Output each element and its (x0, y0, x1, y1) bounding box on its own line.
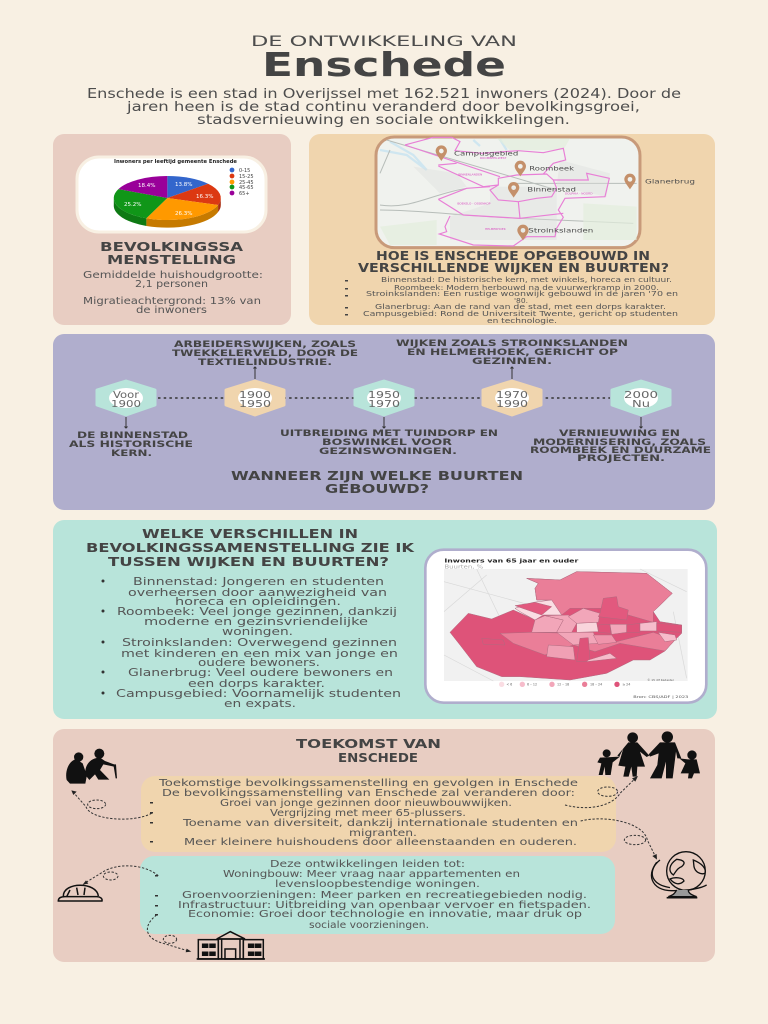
box: bevolkingssamenstelling toekomst: De bevolkingssamenstelling van Enschede zal veranderen door: (162, 788, 575, 799)
arrow: gebouw (147, 915, 191, 952)
node: 1950-1970 (355, 381, 413, 415)
panel: toekomst (53, 729, 715, 962)
list: wijken: Binnenstad: De historische kern, met winkels, horeca en cultuur. (381, 275, 672, 284)
list: verschillen: moderne en gezinsvriendelijke (144, 616, 368, 628)
heading: tijdlijn (231, 469, 523, 496)
label: vernieuwing: VERNIEUWING EN (559, 429, 680, 439)
label: binnenstad: KERN. (111, 449, 152, 459)
label: binnenstad: ALS HISTORISCHE (69, 440, 193, 450)
arrow: gezin (565, 776, 638, 808)
label: vernieuwing: MODERNISERING, ZOALS (533, 438, 706, 448)
map: inwoners 65+: Bron: CBS/ADF | 2023 (633, 695, 688, 699)
wijkenkaart: ROOMBEEK-WEST (480, 156, 506, 160)
box: gevolgen: Groenvoorzieningen: Meer parken en recreatiegebieden nodig. (182, 890, 587, 901)
node: 2000-nu (612, 381, 670, 415)
node: 1950-1970: 1970 (368, 399, 400, 410)
list: wijken: Glanerbrug: Aan de rand van de stad, met een dorps karakter. (375, 302, 666, 311)
timeline line (158, 397, 610, 399)
text: kerncijfers (83, 270, 263, 316)
node: 2000-nu: 2000 (624, 390, 658, 401)
label: vernieuwing: ROOMBEEK EN DUURZAME (530, 446, 711, 456)
node: 1900-1950: 1950 (239, 399, 271, 410)
list: wijken: '80. (514, 296, 528, 305)
icon: wereldbol (651, 852, 707, 898)
list: verschillen: met kinderen en een mix van jonge en (121, 648, 398, 660)
pie chart card: 25-45 (239, 180, 254, 186)
intro text: Enschede is een stad in Overijssel met 162.521 inwoners (2024). Door de (87, 87, 681, 102)
map legend: ≥ 24 (622, 683, 630, 687)
map labels: Roombeek (529, 166, 574, 173)
map labels (454, 150, 695, 234)
node: 1970-1990: 1990 (496, 399, 528, 410)
box: bevolkingssamenstelling toekomst: Meer kleinere huishoudens door alleenstaanden en ouderen. (184, 837, 577, 848)
heading: bevolkingssamenstelling (100, 240, 244, 267)
panel: tijdlijn (53, 334, 715, 510)
text: kerncijfers: 2,1 personen (135, 279, 208, 290)
heading: tijdlijn: WANNEER ZIJN WELKE BUURTEN (231, 469, 523, 483)
wijkenkaart: BINNENLANDEN (458, 173, 482, 177)
map legend: 6 – 12 (527, 683, 537, 687)
label: uitbreiding: UITBREIDING MET TUINDORP EN (280, 429, 498, 439)
node: voor 1900 (97, 381, 155, 415)
heading: wijken (358, 249, 669, 275)
pie chart card: 16.3% (196, 194, 213, 200)
label: binnenstad: DE BINNENSTAD (77, 431, 188, 441)
map labels: Campusgebied (454, 150, 518, 157)
box: gevolgen: Woningbouw: Meer vraag naar appartementen en (223, 869, 520, 880)
map: inwoners 65+: © 15 dlf Kadaster (647, 678, 675, 682)
label: vernieuwing (530, 429, 711, 464)
intro text (87, 87, 681, 128)
heading: bevolkingssamenstelling: BEVOLKINGSSA (100, 240, 244, 254)
label: binnenstad (69, 431, 193, 459)
intro text: jaren heen is de stad continu veranderd door bevolkingsgroei, (126, 100, 640, 115)
list: wijken: en technologie. (487, 316, 557, 325)
pie chart card: 45-65 (239, 185, 254, 191)
panel: wijken en buurten (309, 134, 715, 325)
box: gevolgen: Infrastructuur: Uitbreiding van openbaar vervoer en fietspaden. (178, 900, 591, 911)
pie chart card: 26.3% (175, 211, 192, 217)
pie chart card (77, 157, 266, 232)
map: inwoners 65+ (425, 550, 706, 703)
title: Enschede (262, 45, 506, 84)
map title: Inwoners van 65 jaar en ouder (444, 558, 579, 564)
list: wijken (345, 275, 678, 325)
box: bevolkingssamenstelling toekomst: Toename van diversiteit, dankzij internationale studenten en (182, 818, 578, 829)
pie chart card: 15-25 (239, 174, 254, 180)
box: bevolkingssamenstelling toekomst: Groei van jonge gezinnen door nieuwbouwwijken. (220, 798, 512, 809)
map pins (436, 145, 636, 240)
map title (444, 558, 579, 570)
list: wijken: Stroinkslanden: Een rustige woonwijk gebouwd in de jaren '70 en (366, 289, 678, 298)
label: uitbreiding: GEZINSWONINGEN. (319, 447, 457, 457)
node: 1900-1950: 1900 (239, 390, 271, 401)
title (251, 34, 517, 84)
list: verschillen: Glanerbrug: Veel oudere bewoners en (128, 667, 393, 679)
list: wijken: Campusgebied: Rond de Universiteit Twente, gericht op studenten (363, 309, 678, 318)
heading: bevolkingssamenstelling: MENSTELLING (107, 253, 236, 267)
icon: helm (58, 885, 102, 901)
panel: bevolkingssamenstelling (53, 134, 291, 325)
pie chart card: 25.2% (124, 202, 141, 208)
list: verschillen: woningen. (222, 626, 293, 638)
heading: toekomst: ENSCHEDE (338, 751, 418, 765)
list: verschillen: Roombeek: Veel jonge gezinnen, dankzij (117, 606, 397, 618)
label: vernieuwing: PROJECTEN. (577, 454, 665, 464)
node: voor 1900: Voor (113, 390, 140, 401)
list: verschillen: Campusgebied: Voornamelijk studenten (116, 688, 401, 700)
map title: Buurten, % (444, 564, 484, 570)
label: arbeiderswijken: ARBEIDERSWIJKEN, ZOALS (174, 340, 356, 350)
timeline connectors (124, 367, 642, 428)
node: voor 1900: 1900 (111, 399, 141, 410)
map legend (499, 682, 630, 687)
node: 1970-1990 (483, 381, 541, 415)
arrow: helm (83, 866, 158, 885)
pie chart card: 65+ (239, 191, 250, 197)
list: verschillen: Binnenstad: Jongeren en studenten (133, 576, 384, 588)
node: 1950-1970: 1950 (368, 390, 400, 401)
box: bevolkingssamenstelling toekomst: Toekomstige bevolkingssamenstelling en gevolgen in Enschede (158, 778, 578, 789)
wijkenkaart: HELMERHOEK (485, 227, 507, 231)
map labels: Binnenstad (527, 187, 576, 194)
label: arbeiderswijken: TEXTIELINDUSTRIE. (198, 358, 332, 368)
list: verschillen: Stroinkslanden: Overwegend gezinnen (122, 637, 397, 649)
label: stroinkslanden: EN HELMERHOEK, GERICHT OP (407, 348, 619, 358)
heading: verschillen (86, 527, 415, 569)
arrow: ouderen (71, 790, 152, 819)
list: verschillen: overheersen door aanwezigheid van (128, 587, 387, 599)
pie chart card: 13.8% (175, 182, 192, 188)
label: arbeiderswijken (172, 340, 358, 368)
wijkenkaart: BOEKELO - OSSENKOP (457, 202, 491, 206)
heading: verschillen: BEVOLKINGSSAMENSTELLING ZIE IK (86, 541, 415, 555)
heading: verschillen: WELKE VERSCHILLEN IN (142, 527, 358, 541)
arrow: wereldbol (581, 819, 657, 860)
box: bevolkingssamenstelling toekomst: migranten. (349, 828, 417, 839)
list: wijken: Roombeek: Modern herbouwd na de vuurwerkramp in 2000. (394, 283, 659, 292)
list: verschillen: oudere bewoners. (198, 657, 320, 669)
node: 2000-nu: Nu (632, 399, 650, 410)
pie chart card: Inwoners per leeftijd gemeente Enschede (114, 159, 237, 165)
label: uitbreiding (280, 429, 498, 457)
box: gevolgen: sociale voorzieningen. (309, 920, 429, 931)
box: bevolkingssamenstelling toekomst: Vergrijzing met meer 65-plussers. (270, 808, 466, 819)
list: verschillen: een dorps karakter. (188, 678, 325, 690)
heading: verschillen: TUSSEN WIJKEN EN BUURTEN? (108, 555, 389, 569)
node: 1970-1990: 1970 (496, 390, 528, 401)
list: verschillen: en expats. (224, 698, 296, 710)
icon: gebouw (197, 932, 265, 959)
heading: wijken: HOE IS ENSCHEDE OPGEBOUWD IN (376, 249, 650, 263)
heading: tijdlijn: GEBOUWD? (325, 482, 429, 496)
map legend: < 6 (506, 683, 512, 687)
map legend: 18 – 24 (590, 683, 602, 687)
map labels: Stroinkslanden (528, 227, 593, 234)
text: kerncijfers: de inwoners (136, 305, 207, 316)
wijkenkaart (376, 137, 695, 248)
box: gevolgen: Economie: Groei door technologie en innovatie, maar druk op (188, 909, 582, 920)
label: stroinkslanden: GEZINNEN. (472, 357, 552, 367)
panel: verschillen (53, 520, 717, 719)
icon: gezin (597, 731, 700, 778)
pie chart card: 18.4% (138, 183, 155, 189)
pie chart card: 0-15 (239, 168, 250, 174)
title: DE ONTWIKKELING VAN (251, 34, 517, 50)
map labels: Glanerbrug (645, 178, 695, 185)
label: stroinkslanden (396, 339, 628, 367)
node: 1900-1950 (226, 381, 284, 415)
label: stroinkslanden: WIJKEN ZOALS STROINKSLANDEN (396, 339, 628, 349)
box: bevolkingssamenstelling toekomst (141, 776, 616, 852)
list: verschillen (102, 576, 401, 710)
intro text: stadsvernieuwing en sociale ontwikkelingen. (197, 113, 570, 128)
icon: ouderen (66, 749, 117, 784)
heading: toekomst: TOEKOMST VAN (296, 737, 441, 751)
wijkenkaart: DOLPHIA - NOORD (565, 191, 593, 195)
text: kerncijfers: Migratieachtergrond: 13% van (83, 296, 261, 307)
box: gevolgen: Deze ontwikkelingen leiden tot: (270, 859, 465, 870)
list: verschillen: horeca en opleidingen. (175, 596, 341, 608)
box: gevolgen: levensloopbestendige woningen. (275, 879, 480, 890)
label: uitbreiding: BOSWINKEL VOOR (322, 438, 452, 448)
heading: toekomst (296, 737, 441, 765)
label: arbeiderswijken: TWEKKELERVELD, DOOR DE (172, 349, 358, 359)
box: gevolgen (140, 856, 615, 934)
heading: wijken: VERSCHILLENDE WIJKEN EN BUURTEN? (358, 261, 669, 275)
text: kerncijfers: Gemiddelde huishoudgrootte: (83, 270, 263, 281)
map legend: 12 – 18 (557, 683, 569, 687)
